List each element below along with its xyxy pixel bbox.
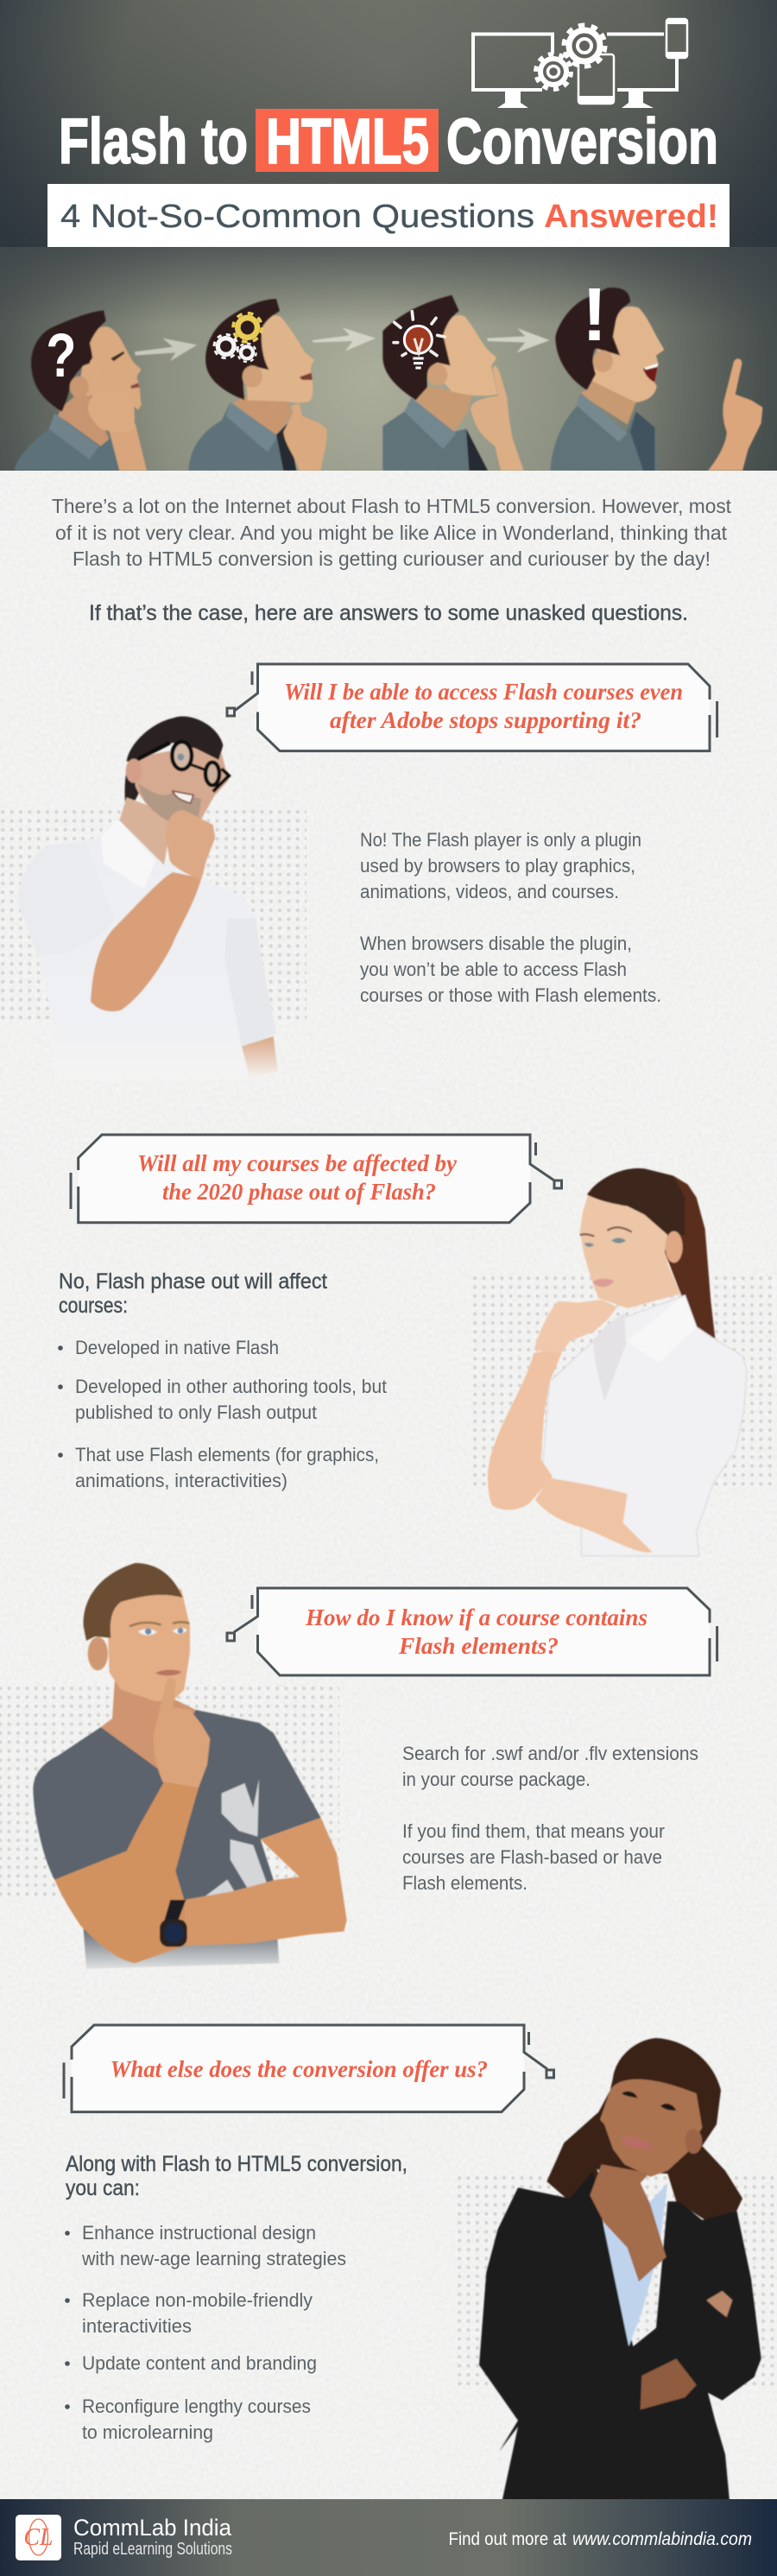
- title: [59, 105, 718, 177]
- hero banner: [0, 0, 777, 471]
- answer 2 heading: [59, 1269, 327, 1318]
- answer 3 text: Search for .swf and/or .flv extensions: [402, 1743, 698, 1764]
- subtitle bar: 4 Not-So-Common Questions: [60, 199, 534, 235]
- answer 3 text: courses are Flash-based or have: [402, 1846, 662, 1868]
- answer 2 heading: No, Flash phase out will affect: [59, 1269, 327, 1294]
- title: HTML5: [266, 105, 429, 177]
- footer: [0, 2499, 777, 2576]
- section 1: [0, 664, 717, 1079]
- answer 4 list: to microlearning: [82, 2421, 213, 2443]
- answer 1 text: [360, 829, 661, 1006]
- answer 2 list: [58, 1337, 387, 1491]
- title: Flash to: [59, 105, 248, 177]
- answer 4 list: Enhance instructional design: [82, 2222, 316, 2244]
- answer 1 text: When browsers disable the plugin,: [360, 933, 632, 954]
- section 2: [58, 1135, 777, 1556]
- answer 3 text: If you find them, that means your: [402, 1820, 665, 1842]
- answer 4 list: [65, 2222, 346, 2443]
- hero people: [15, 272, 762, 471]
- answer 4 list: Update content and branding: [82, 2352, 317, 2374]
- arrow 2: [313, 327, 376, 351]
- hero background people: [0, 247, 777, 471]
- dot pattern: [0, 807, 306, 1022]
- answer 4 list: with new-age learning strategies: [81, 2248, 346, 2269]
- answer 4 heading: you can:: [66, 2176, 140, 2200]
- question bubble 3: Flash elements?: [398, 1633, 559, 1659]
- person 1 with question mark: [15, 310, 147, 471]
- answer 4 list: interactivities: [82, 2315, 192, 2337]
- subtitle bar: [47, 184, 730, 247]
- answer 2 list: published to only Flash output: [75, 1402, 317, 1423]
- answer 4 heading: Along with Flash to HTML5 conversion,: [66, 2152, 407, 2176]
- dot pattern: [0, 1684, 339, 1898]
- person 4 with exclamation mark: [550, 272, 762, 471]
- website call to action: www.commlabindia.com: [572, 2529, 752, 2549]
- answer 4 list: Replace non-mobile-friendly: [82, 2289, 313, 2311]
- intro paragraph: [52, 495, 732, 570]
- question bubble 1: [227, 664, 717, 751]
- answer 3 text: Flash elements.: [402, 1872, 527, 1894]
- answer 3 text: [402, 1743, 698, 1894]
- person 4 with exclamation mark: !: [582, 272, 607, 357]
- dot pattern: [471, 1274, 777, 1488]
- section 4: [64, 2025, 777, 2501]
- person 3 with light bulb: [382, 295, 524, 471]
- logo: CL: [23, 2524, 54, 2551]
- intro paragraph: Flash to HTML5 conversion is getting curiouser and curiouser by the day!: [73, 547, 711, 570]
- question bubble 3: How do I know if a course contains: [305, 1604, 648, 1630]
- question bubble 4: [64, 2025, 554, 2112]
- intro subheading: If that’s the case, here are answers to some unasked questions.: [89, 601, 688, 625]
- man in grey t-shirt: [33, 1563, 347, 1969]
- intro paragraph: There’s a lot on the Internet about Flash to HTML5 conversion. However, most: [52, 495, 732, 517]
- arrow 1: [135, 339, 197, 361]
- person 1 with question mark: ?: [46, 321, 76, 390]
- website call to action: Find out more at: [449, 2529, 566, 2549]
- woman in black jacket: [479, 2038, 761, 2501]
- subtitle bar: Answered!: [544, 199, 718, 235]
- answer 1 text: animations, videos, and courses.: [360, 881, 619, 902]
- answer 1 text: you won’t be able to access Flash: [360, 959, 627, 980]
- answer 4 list: Reconfigure lengthy courses: [82, 2396, 311, 2417]
- answer 2 heading: courses:: [59, 1294, 128, 1318]
- answer 3 text: in your course package.: [402, 1769, 591, 1790]
- person 2 with gears: [188, 299, 327, 471]
- hero background top: [0, 0, 777, 250]
- woman with ponytail: [488, 1168, 747, 1556]
- brand name: CommLab India: [73, 2515, 232, 2541]
- question bubble 2: the 2020 phase out of Flash?: [162, 1179, 436, 1205]
- question bubble 4: What else does the conversion offer us?: [111, 2056, 488, 2082]
- question bubble 3: [227, 1588, 717, 1675]
- answer 2 list: That use Flash elements (for graphics,: [75, 1444, 379, 1465]
- website call to action: [449, 2529, 752, 2549]
- section 3: [0, 1563, 717, 1969]
- man with glasses: [17, 716, 278, 1079]
- logo: [16, 2515, 61, 2560]
- answer 4 heading: [66, 2152, 407, 2200]
- answer 1 text: courses or those with Flash elements.: [360, 984, 661, 1006]
- answer 2 list: animations, interactivities): [75, 1470, 287, 1491]
- icon: devices and gears: [473, 19, 687, 108]
- question bubble 1: Will I be able to access Flash courses even: [284, 679, 683, 705]
- question bubble 2: [71, 1135, 561, 1223]
- dot pattern: [455, 2174, 777, 2389]
- answer 2 list: Developed in native Flash: [75, 1337, 279, 1358]
- arrow 3: [487, 328, 550, 352]
- answer 2 list: Developed in other authoring tools, but: [75, 1376, 387, 1397]
- bulb: [394, 312, 445, 368]
- question bubble 2: Will all my courses be affected by: [137, 1150, 458, 1176]
- answer 1 text: used by browsers to play graphics,: [360, 855, 635, 877]
- answer 1 text: No! The Flash player is only a plugin: [360, 829, 641, 851]
- question bubble 1: after Adobe stops supporting it?: [330, 707, 641, 733]
- tagline: Rapid eLearning Solutions: [73, 2540, 232, 2559]
- highlight box: [256, 109, 439, 172]
- intro paragraph: of it is not very clear. And you might be like Alice in Wonderland, thinking that: [55, 522, 728, 544]
